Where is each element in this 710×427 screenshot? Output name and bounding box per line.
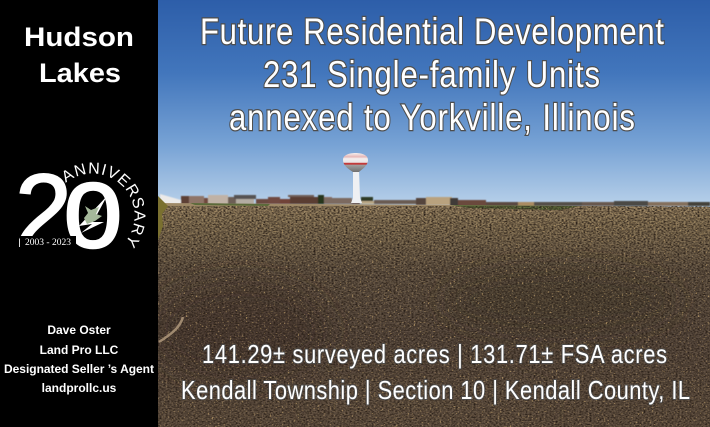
field bbox=[158, 203, 710, 427]
title: 231 Single-family Units bbox=[263, 55, 600, 96]
soil texture bbox=[158, 206, 710, 427]
field shading bbox=[150, 266, 680, 427]
anniversary arc text: ANNIVERSARY bbox=[64, 162, 146, 249]
leaf and bolt mark bbox=[79, 196, 107, 233]
horizon: houses and commercial buildings bbox=[160, 194, 710, 207]
logo: 20th anniversary bbox=[15, 153, 146, 268]
foreground bush at left edge bbox=[158, 196, 168, 240]
sky bbox=[158, 0, 710, 208]
water tower bbox=[343, 153, 368, 203]
heading: Hudson Lakes bbox=[24, 22, 134, 88]
contact block: Dave Oster bbox=[47, 323, 111, 337]
logo: 20th anniversary: 0 bbox=[64, 165, 122, 267]
contact block: landprollc.us bbox=[42, 381, 117, 395]
title bbox=[200, 12, 664, 139]
heading: Hudson Lakes: Lakes bbox=[39, 58, 121, 88]
property details bbox=[181, 340, 690, 405]
green strip along the horizon bbox=[190, 203, 580, 210]
property details: Kendall Township | Section 10 | Kendall County, IL bbox=[181, 376, 690, 405]
contact block: Designated Seller ’s Agent bbox=[4, 362, 154, 376]
fallen branch bbox=[159, 317, 183, 342]
contact block: Land Pro LLC bbox=[40, 343, 119, 357]
photo: field and water tower under blue sky bbox=[150, 0, 710, 427]
property details: 141.29± surveyed acres | 131.71± FSA acres bbox=[202, 340, 667, 369]
heading: Hudson Lakes: Hudson bbox=[24, 22, 134, 52]
logo: 20th anniversary: 2 bbox=[15, 153, 72, 268]
title: annexed to Yorkville, Illinois bbox=[229, 98, 635, 139]
contact block bbox=[4, 323, 154, 395]
logo: 20th anniversary: 2003 - 2023 bbox=[25, 238, 71, 248]
date strip bbox=[20, 236, 76, 247]
title: Future Residential Development bbox=[200, 12, 664, 53]
left panel bbox=[4, 22, 158, 395]
